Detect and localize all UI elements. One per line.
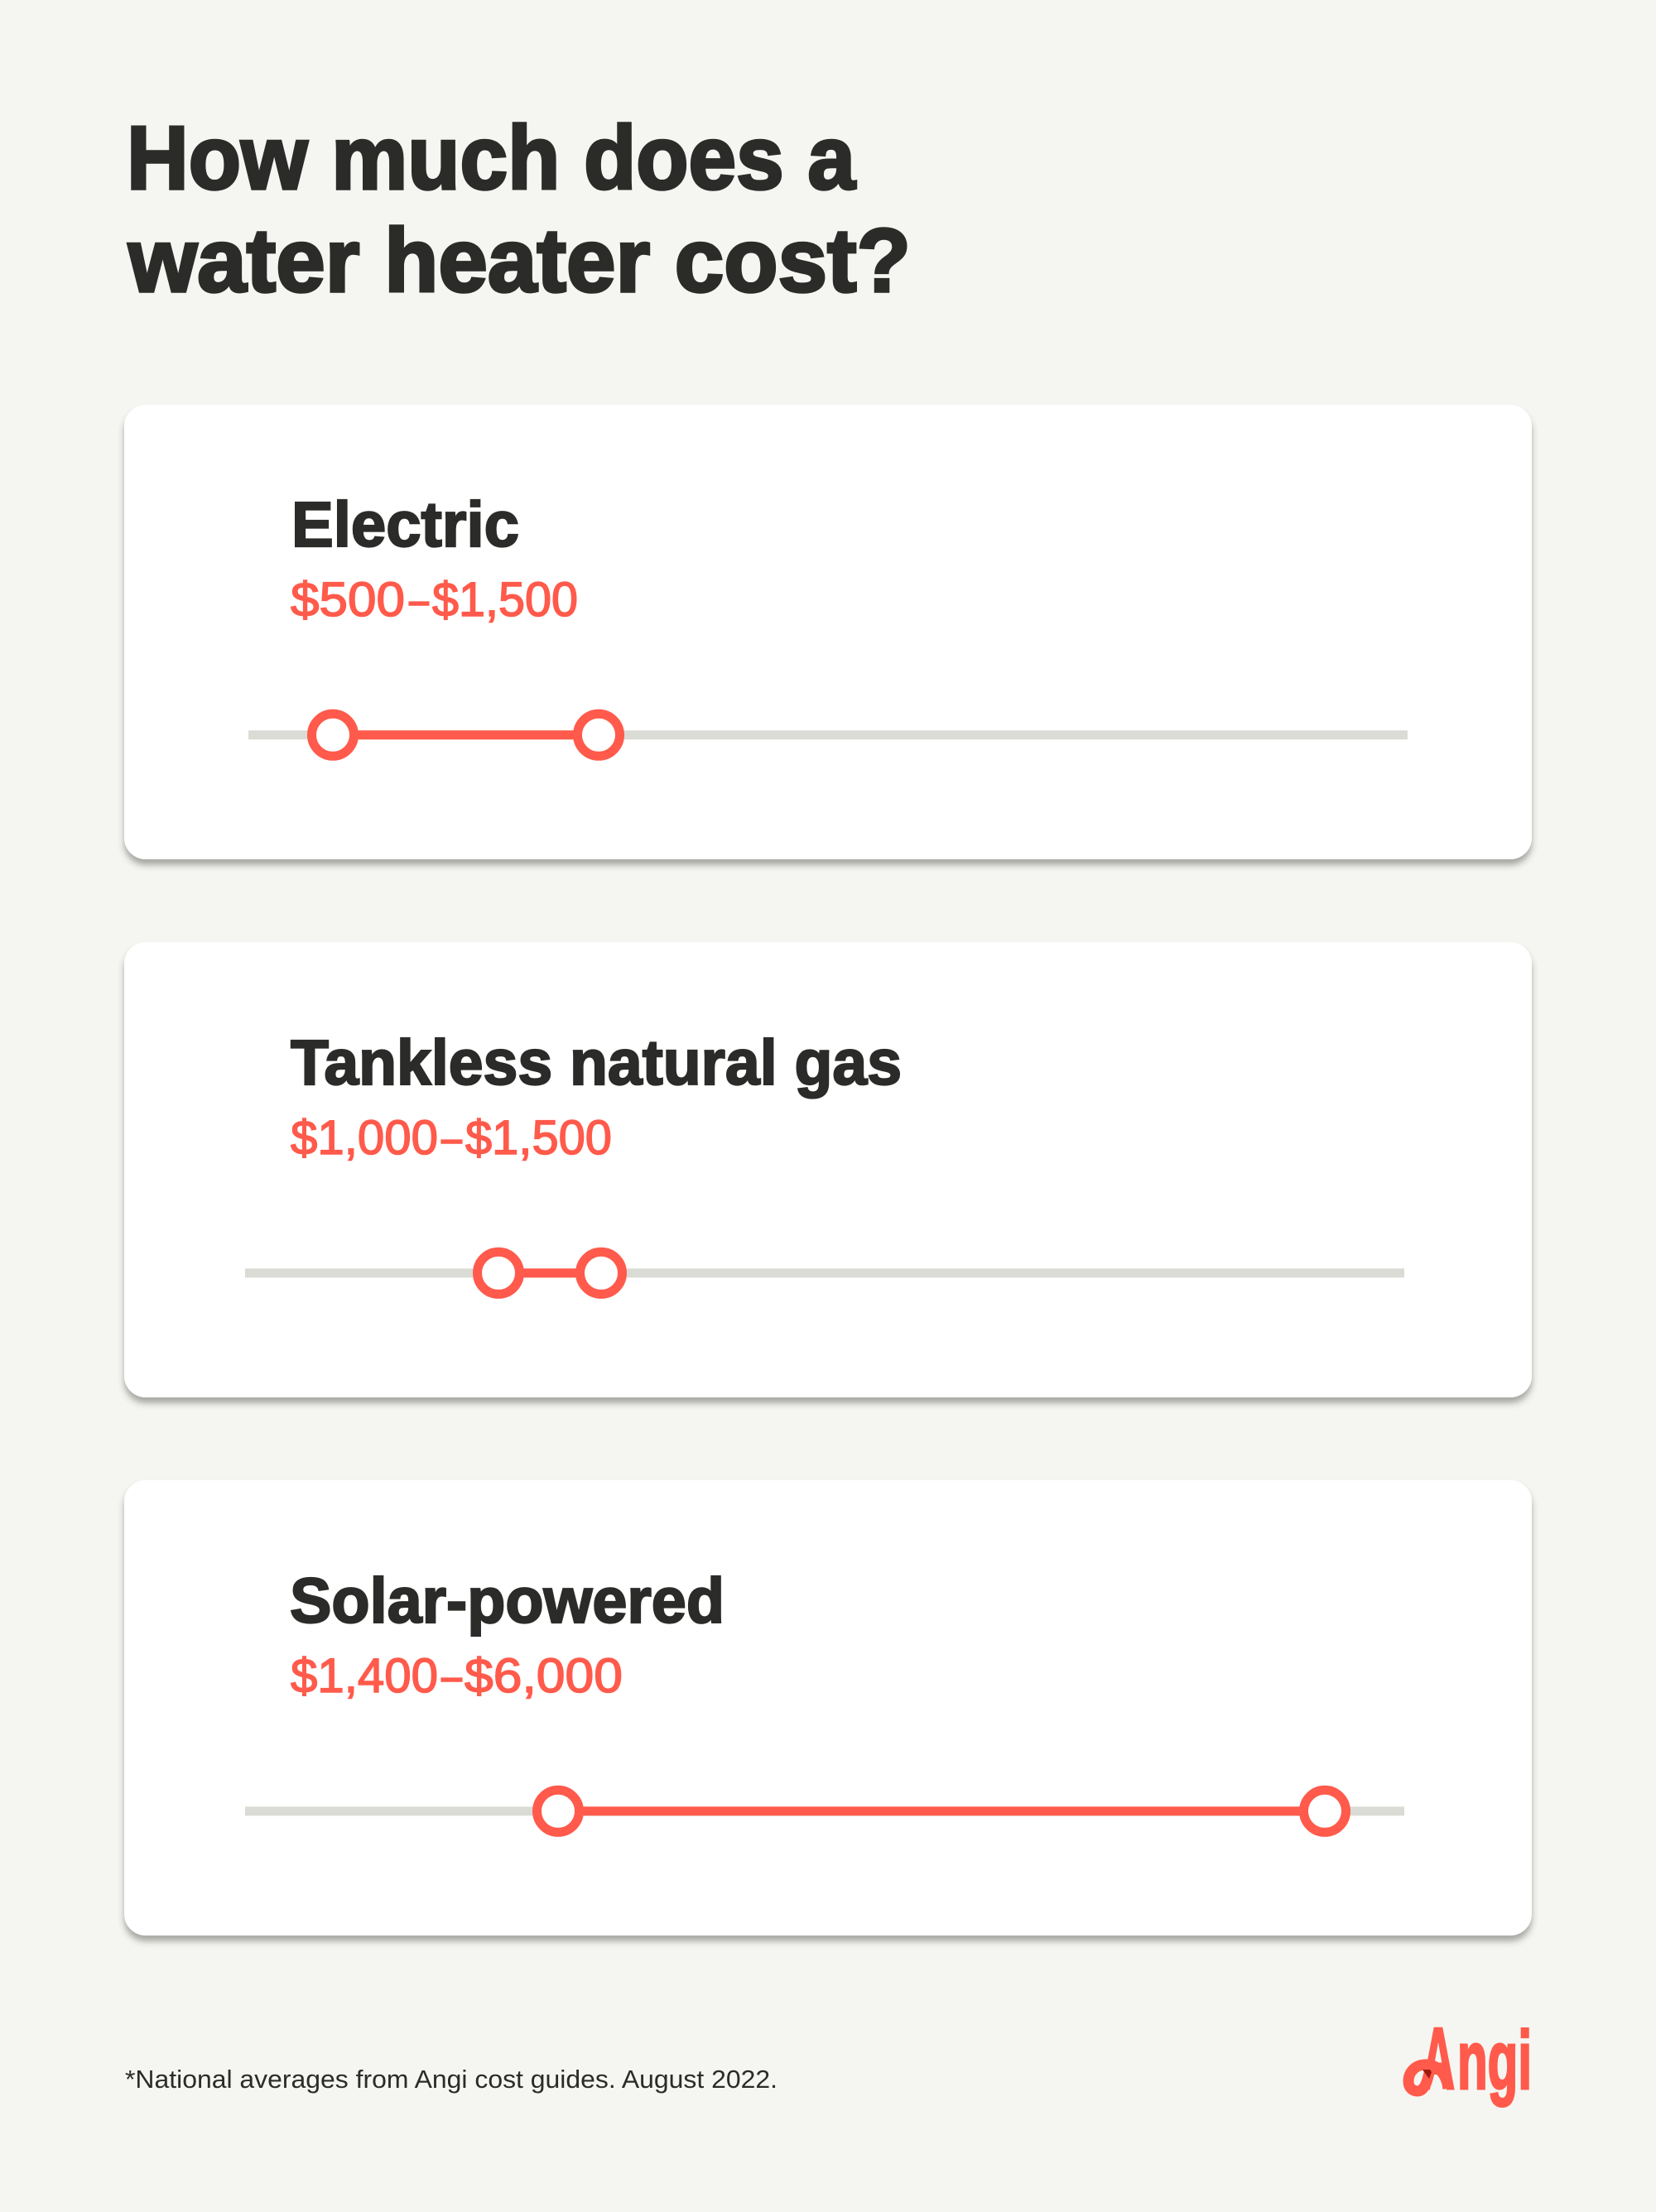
panel: solar-powered (124, 1480, 1532, 1935)
price: electric (291, 573, 578, 627)
price: solar-powered: – (441, 1649, 463, 1703)
range slider: tankless natural gas (245, 1252, 1404, 1294)
price: electric: – (409, 573, 430, 627)
price: electric: $500 (291, 573, 405, 627)
title: How much does a (127, 108, 856, 209)
heading: tankless natural gas: Tankless natural gas (291, 1027, 902, 1099)
price: solar-powered: $6,000 (465, 1649, 623, 1703)
price: electric: $1,500 (432, 573, 578, 627)
range slider: solar-powered (245, 1790, 1404, 1832)
heading: electric: Electric (291, 489, 519, 560)
heading: solar-powered: Solar-powered (290, 1565, 724, 1637)
title (127, 108, 911, 311)
logo: Angi: A (1422, 2010, 1455, 2108)
logo: Angi (1408, 2010, 1532, 2108)
price: tankless natural gas: – (441, 1111, 463, 1165)
price: tankless natural gas (291, 1111, 612, 1165)
price: tankless natural gas: $1,000 (291, 1111, 438, 1165)
panel: tankless natural gas (124, 942, 1532, 1397)
panel: electric (124, 405, 1532, 859)
footnote: *National averages from Angi cost guides. August 2022. (125, 2065, 777, 2094)
logo: Angi: ngi (1457, 2014, 1532, 2107)
title: water heater cost? (128, 210, 911, 311)
range slider: electric (248, 714, 1408, 756)
price: tankless natural gas: $1,500 (465, 1111, 612, 1165)
price: solar-powered (291, 1649, 623, 1703)
price: solar-powered: $1,400 (291, 1649, 438, 1703)
